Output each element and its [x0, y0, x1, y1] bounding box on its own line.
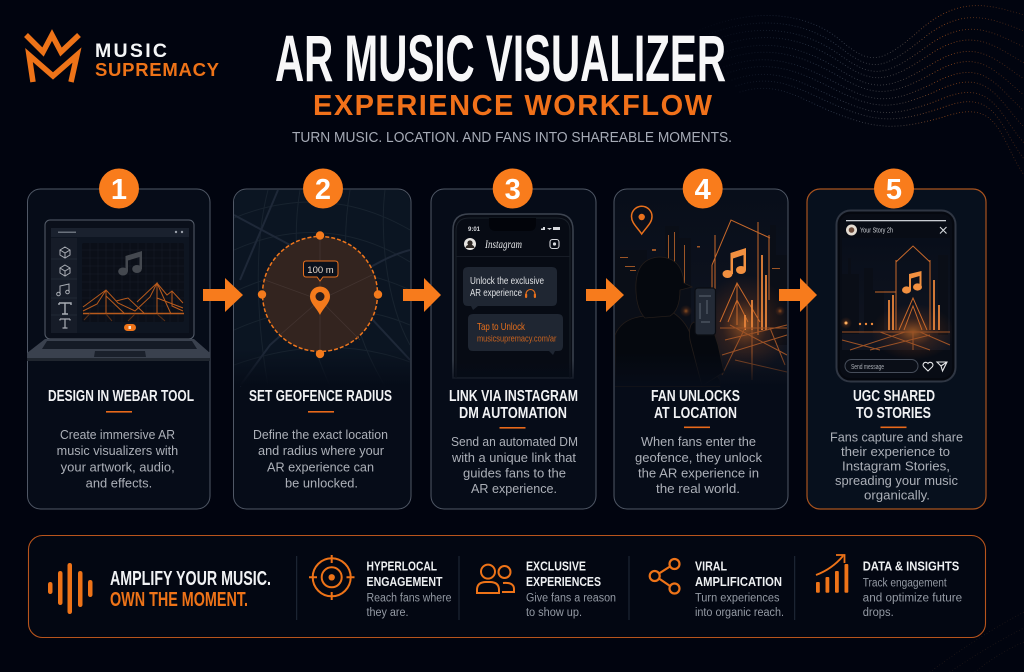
- step description: AR experience can: [267, 460, 374, 474]
- icon: rising bar chart: [816, 555, 848, 593]
- phone held up: [695, 288, 716, 335]
- icon: crown mark: [26, 35, 79, 82]
- step description: your artwork, audio,: [61, 460, 175, 474]
- icon: heart: [923, 362, 933, 371]
- logo: Music Supremacy: [26, 35, 220, 82]
- panel: step 3 instagram DM: [431, 189, 596, 509]
- step description: organically.: [864, 488, 930, 502]
- benefit text: ENGAGEMENT: [366, 574, 443, 589]
- benefit text: Reach fans where: [366, 593, 452, 605]
- dotted particle wave: [700, 6, 1024, 175]
- step number 5: [874, 168, 914, 208]
- step description: the AR experience in: [638, 466, 759, 480]
- distance label: [304, 261, 338, 281]
- geofence circle: [262, 236, 378, 352]
- icon: close: [940, 227, 946, 234]
- step number 2: [303, 168, 343, 208]
- benefit: viral amplification: [650, 559, 784, 619]
- illustration: map with geofence: [234, 190, 410, 386]
- step description: [57, 428, 178, 490]
- message bubble: tap to unlock: musicsupremacy.com/ar: [477, 334, 556, 344]
- subtitle: experience workflow: EXPERIENCE WORKFLOW: [313, 90, 713, 122]
- message bubble: tap to unlock: [468, 314, 563, 355]
- step number 1: 1: [111, 174, 127, 206]
- step heading: SET GEOFENCE RADIUS: [249, 388, 392, 405]
- step heading: [449, 388, 578, 422]
- step number 2: 2: [315, 174, 331, 206]
- panel: step 2 geofence: [234, 189, 411, 509]
- icon: target: [309, 555, 354, 600]
- message bubble: unlock: [463, 267, 557, 310]
- icon: share: [650, 559, 680, 594]
- laptop base: [27, 339, 210, 358]
- step description: their experience to: [841, 445, 950, 459]
- step description: [451, 435, 578, 496]
- illustration: phone with Instagram DM: 9:01: [468, 227, 481, 233]
- step number 1: [99, 168, 139, 208]
- panel: step 1 design: [27, 189, 210, 509]
- city: [842, 333, 859, 334]
- icon: music note grey: [118, 251, 142, 276]
- arrow 3 to 4: [586, 278, 624, 312]
- step description: Define the exact location: [253, 428, 388, 442]
- story bar: [846, 220, 946, 221]
- glow: [876, 308, 949, 356]
- illustration: phone with Instagram story: [836, 210, 956, 382]
- app name: Instagram: [484, 239, 522, 251]
- panel: step 5 UGC stories: [807, 189, 986, 509]
- title: AR MUSIC VISUALIZER: [275, 21, 726, 95]
- person silhouette: [615, 257, 724, 386]
- icon: music note: [722, 248, 746, 278]
- step description: guides fans to the: [463, 466, 566, 480]
- step heading: AT LOCATION: [654, 405, 737, 422]
- chart: orange peaks: [83, 283, 184, 321]
- illustration: phone with Instagram DM: [445, 214, 581, 386]
- neon structure: [875, 246, 939, 330]
- radius handles: [258, 231, 382, 358]
- icon: sound wave: [48, 563, 92, 614]
- benefit text: Track engagement: [863, 578, 947, 590]
- step description: with a unique link that: [451, 451, 577, 465]
- neon ground: [842, 332, 950, 350]
- icon: people: [477, 565, 514, 593]
- step heading: UGC SHARED: [853, 388, 935, 405]
- avatar: [846, 224, 857, 236]
- step description: and radius where your: [258, 444, 384, 458]
- benefit text: VIRAL: [695, 559, 727, 574]
- neon ground grid: [720, 325, 787, 380]
- step description: spreading your music: [835, 474, 958, 488]
- slogan: AMPLIFY YOUR MUSIC.: [110, 568, 271, 590]
- glow: [715, 282, 785, 364]
- step description: AR experience.: [471, 482, 557, 496]
- step description: be unlocked.: [285, 476, 358, 490]
- avatar: [464, 238, 476, 250]
- step description: [830, 431, 963, 502]
- benefit text: to show up.: [526, 607, 582, 619]
- icon: location pin outline: [631, 206, 652, 234]
- benefit text: [863, 559, 962, 619]
- send message field: Send message: [851, 364, 884, 371]
- arrow 2 to 3: [403, 278, 441, 312]
- brand name: MUSIC: [95, 40, 167, 62]
- city buildings: [615, 225, 787, 345]
- step heading: LINK VIA INSTAGRAM: [449, 388, 578, 405]
- step heading: [853, 388, 935, 422]
- icon: music note: [902, 271, 922, 294]
- panel: benefits bar: [28, 536, 986, 638]
- illustration: laptop with AR editor: [27, 220, 210, 361]
- arrow 1 to 2: [203, 278, 243, 312]
- step description: the real world.: [656, 482, 740, 496]
- brand name: SUPREMACY: [95, 59, 220, 80]
- illustration: fan filming AR scene in the city: [615, 219, 787, 386]
- tagline: TURN MUSIC. LOCATION. AND FANS INTO SHAREABLE MOMENTS.: [292, 129, 732, 146]
- step heading: [651, 388, 740, 422]
- benefit text: and optimize future: [863, 593, 962, 605]
- benefit text: Turn experiences: [695, 593, 780, 605]
- arrow 4 to 5: [779, 278, 817, 312]
- icon: sidebar tools: [51, 247, 77, 328]
- message bubble: tap to unlock: Tap to Unlock: [477, 321, 526, 333]
- step description: Send an automated DM: [451, 435, 578, 449]
- step number 4: [683, 168, 723, 208]
- benefit text: EXPERIENCES: [526, 574, 601, 589]
- step heading: DM AUTOMATION: [459, 405, 567, 422]
- panel: step 4 fan unlocks: [614, 189, 791, 509]
- step description: [253, 428, 388, 490]
- benefit text: [366, 559, 452, 619]
- step description: and effects.: [86, 476, 152, 490]
- step number 3: [493, 168, 533, 208]
- step number 4: 4: [695, 174, 711, 206]
- slogan: OWN THE MOMENT.: [110, 589, 248, 611]
- benefit text: into organic reach.: [695, 607, 784, 619]
- step heading: FAN UNLOCKS: [651, 388, 740, 405]
- benefit text: HYPERLOCAL: [366, 559, 437, 574]
- step description: Create immersive AR: [60, 428, 175, 442]
- icon: headphones: [526, 290, 535, 297]
- benefit: hyperlocal engagement: [309, 555, 452, 619]
- benefit: data and insights: [816, 555, 962, 619]
- message bubble: unlock: Unlock the exclusive: [470, 276, 544, 287]
- play button: [124, 324, 136, 331]
- benefit text: DATA & INSIGHTS: [863, 559, 959, 574]
- send message field: [845, 360, 918, 372]
- neon structure: [712, 220, 770, 335]
- step number 5: 5: [886, 174, 902, 206]
- step description: Fans capture and share: [830, 431, 963, 445]
- benefit: exclusive experiences: [477, 559, 616, 619]
- step heading: DESIGN IN WEBAR TOOL: [48, 388, 194, 405]
- slogan: [110, 568, 271, 611]
- step heading: TO STORIES: [856, 405, 931, 422]
- step description: Instagram Stories,: [842, 460, 950, 474]
- distance label: 100 m: [307, 265, 334, 276]
- benefit text: Give fans a reason: [526, 593, 616, 605]
- faint corner contour lines: [930, 612, 1024, 672]
- step number 3: 3: [505, 174, 521, 206]
- benefit text: they are.: [366, 607, 408, 619]
- step description: [635, 435, 763, 496]
- benefit text: AMPLIFICATION: [695, 574, 782, 589]
- step description: When fans enter the: [641, 435, 756, 449]
- canvas grid: [82, 243, 184, 322]
- benefit text: drops.: [863, 607, 894, 619]
- story name: Your Story 2h: [860, 228, 893, 234]
- brand name: [95, 40, 220, 80]
- step description: geofence, they unlock: [635, 451, 763, 465]
- benefit text: [695, 559, 784, 619]
- step description: music visualizers with: [57, 444, 178, 458]
- benefit text: EXCLUSIVE: [526, 559, 586, 574]
- benefit text: [526, 559, 616, 619]
- message bubble: unlock: AR experience: [470, 288, 522, 299]
- icon: send: [937, 362, 947, 371]
- icon: location pin: [310, 286, 330, 315]
